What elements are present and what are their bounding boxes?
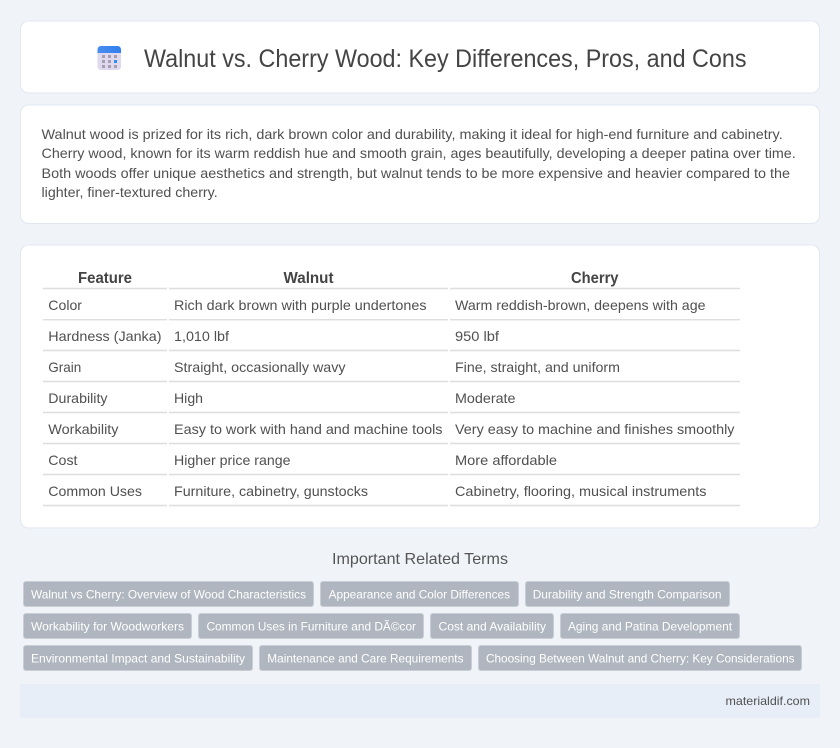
text block: introduction: Walnut wood is prized for its rich, dark brown color and durability, making it ideal for high-end furniture and cabinetry. (42, 126, 783, 142)
table row: cost: Cost (48, 452, 78, 468)
table row: hardness (48, 328, 499, 344)
table row: workability: Very easy to machine and finishes smoothly (455, 421, 734, 437)
table row: color: Color (48, 297, 82, 313)
tag: environmental: Environmental Impact and Sustainability (31, 652, 245, 666)
table row: color: Rich dark brown with purple undertones (174, 297, 426, 313)
related terms tags (24, 582, 802, 670)
tag: workability (24, 614, 192, 638)
table header: Walnut (284, 270, 334, 287)
tag: durability (526, 582, 730, 606)
footer source: materialdif.com (726, 694, 810, 708)
table row: cost: Higher price range (174, 452, 291, 468)
table row: cost (48, 452, 557, 468)
table row: hardness: 950 lbf (455, 328, 499, 344)
tag: maintenance: Maintenance and Care Requirements (267, 652, 464, 666)
tag: aging: Aging and Patina Development (568, 620, 733, 634)
table row: common uses: Cabinetry, flooring, musical instruments (455, 483, 706, 499)
footer (20, 684, 820, 718)
tag: durability: Durability and Strength Comparison (533, 588, 722, 602)
table row: color (48, 297, 706, 313)
tag: maintenance (260, 646, 472, 670)
table row: workability: Workability (48, 421, 118, 437)
panel: header (20, 21, 820, 93)
title: Walnut vs. Cherry Wood: Key Differences, Pros, and Cons (144, 45, 746, 73)
table row: common uses (48, 483, 707, 499)
panel: comparison table (20, 245, 820, 528)
table row: grain: Grain (48, 359, 81, 375)
text block: introduction: Cherry wood, known for its warm reddish hue and smooth grain, ages beautifully, developing a deeper patina over time. (42, 145, 796, 161)
tag: workability: Workability for Woodworkers (31, 620, 184, 634)
tag: choosing (478, 646, 802, 670)
table row: durability: High (174, 390, 203, 406)
tag: choosing: Choosing Between Walnut and Cherry: Key Considerations (486, 652, 794, 666)
tag: appearance: Appearance and Color Differences (329, 588, 510, 602)
tag: cost: Cost and Availability (438, 620, 546, 634)
table row: common uses: Furniture, cabinetry, gunstocks (174, 483, 368, 499)
table row: hardness: Hardness (Janka) (48, 328, 161, 344)
table row: grain (48, 359, 620, 375)
heading: related terms: Important Related Terms (332, 551, 508, 568)
table row: hardness: 1,010 lbf (174, 328, 229, 344)
table row: durability: Durability (48, 390, 108, 406)
tag: overview (24, 582, 314, 606)
tag: cost (430, 614, 554, 638)
panel: introduction text (20, 105, 820, 224)
text block: introduction: Both woods offer unique aesthetics and strength, but walnut tends to be more expensive and heavier compared to the (42, 165, 790, 181)
table row: workability (48, 421, 735, 437)
tag: aging (560, 614, 740, 638)
text block: introduction: lighter, finer-textured cherry. (42, 184, 218, 200)
table row: grain: Fine, straight, and uniform (455, 359, 620, 375)
table row: common uses: Common Uses (48, 483, 142, 499)
table header: Cherry (571, 270, 619, 287)
tag: appearance (320, 582, 518, 606)
table row: cost: More affordable (455, 452, 557, 468)
icon: calendar (98, 46, 121, 70)
table row: durability: Moderate (455, 390, 516, 406)
table header: Feature (78, 270, 132, 287)
tag: common uses: Common Uses in Furniture and DÃ©cor (206, 620, 416, 634)
tag: environmental (24, 646, 252, 670)
table row: workability: Easy to work with hand and machine tools (174, 421, 442, 437)
text block: introduction (42, 126, 796, 200)
table row: color: Warm reddish-brown, deepens with age (455, 297, 706, 313)
tag: common uses (198, 614, 424, 638)
table header (78, 270, 619, 287)
table row: grain: Straight, occasionally wavy (174, 359, 346, 375)
tag: overview: Walnut vs Cherry: Overview of Wood Characteristics (31, 588, 306, 602)
table row: durability (48, 390, 516, 406)
